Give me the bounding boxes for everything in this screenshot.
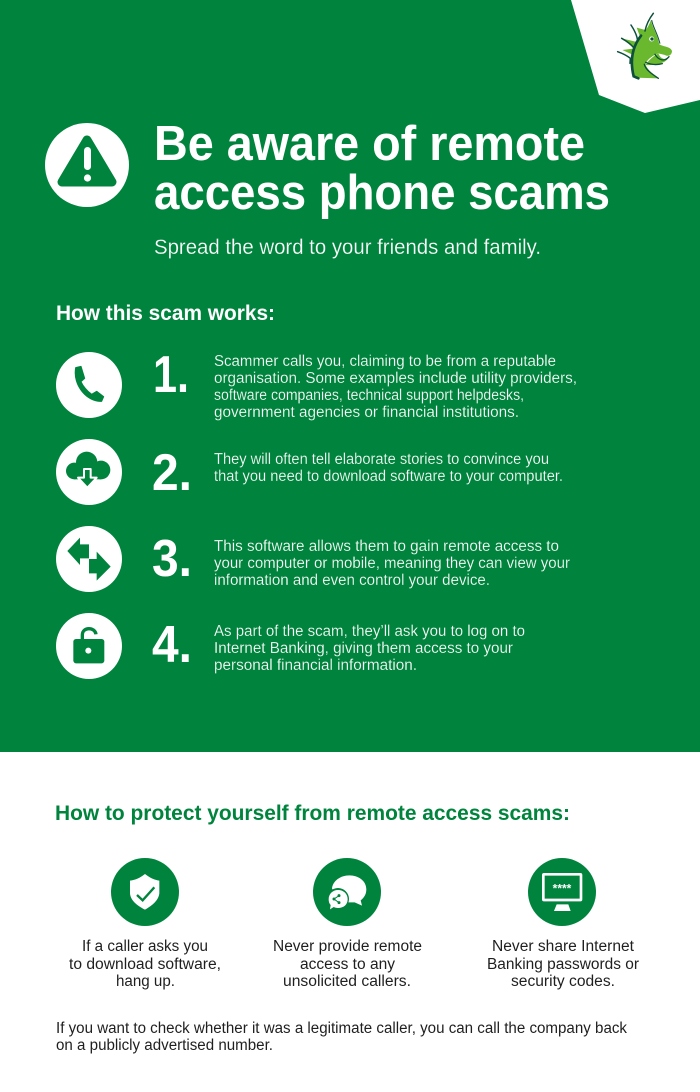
step 3 text: your computer or mobile, meaning they can view your (214, 555, 570, 572)
panel: green header and scam steps background (0, 0, 700, 752)
step 1 text: government agencies or financial institutions. (214, 404, 519, 421)
tip 2 text (273, 938, 422, 990)
icon: chat bubbles with share symbol (313, 858, 381, 926)
step 2 text: that you need to download software to your computer. (214, 468, 563, 485)
step 4 text (214, 623, 525, 674)
step 4 number: 4. (152, 616, 192, 674)
step 1 text: organisation. Some examples include utility providers, (214, 370, 577, 387)
tip 3 text: Never share Internet (492, 938, 635, 955)
icon: phone (56, 352, 122, 418)
tip 2 text: access to any (300, 956, 395, 973)
heading: how this scam works: How this scam works: (56, 301, 275, 325)
tip 1 text: If a caller asks you (82, 938, 208, 955)
step 1 text (214, 353, 577, 421)
step 2 text: They will often tell elaborate stories to convince you (214, 451, 549, 468)
footer note (56, 1020, 627, 1054)
step 4 text: As part of the scam, they’ll ask you to log on to (214, 623, 525, 640)
step 3 text: information and even control your device. (214, 572, 490, 589)
step 3 text: This software allows them to gain remote access to (214, 538, 559, 555)
title (154, 117, 610, 220)
footer note: on a publicly advertised number. (56, 1037, 273, 1054)
footer note: If you want to check whether it was a legitimate caller, you can call the company back (56, 1020, 627, 1037)
step 3 text (214, 538, 570, 589)
step 4 text: personal financial information. (214, 657, 417, 674)
step 3 number: 3. (152, 530, 192, 588)
tip 3 text: security codes. (511, 973, 615, 990)
tip 1 text: hang up. (116, 973, 175, 990)
tip 2 text: Never provide remote (273, 938, 422, 955)
step 1 number: 1. (153, 346, 189, 404)
tip 3 text: Banking passwords or (487, 956, 639, 973)
step 1 text: Scammer calls you, claiming to be from a reputable (214, 353, 556, 370)
icon: green dragon logo (618, 13, 672, 78)
icon: shield with check (111, 858, 179, 926)
tip 1 text (69, 938, 221, 990)
step 2 text (214, 451, 563, 485)
icon: computer monitor with password (528, 858, 596, 926)
icon: two-way arrows (56, 526, 122, 592)
step 4 text: Internet Banking, giving them access to your (214, 640, 513, 657)
subtitle: Spread the word to your friends and family. (154, 236, 541, 259)
tip 3 text (487, 938, 639, 990)
panel: white logo tab (571, 0, 700, 113)
heading: how to protect yourself: How to protect yourself from remote access scams: (55, 801, 570, 825)
title: Be aware of remote (154, 117, 585, 171)
icon: warning triangle (45, 123, 129, 207)
tip 1 text: to download software, (69, 956, 221, 973)
icon: cloud download (56, 439, 122, 505)
step 2 number: 2. (152, 444, 192, 502)
step 1 text: software companies, technical support helpdesks, (214, 387, 524, 404)
icon: computer monitor with password: **** (553, 881, 572, 895)
tip 2 text: unsolicited callers. (283, 973, 411, 990)
title: access phone scams (154, 166, 610, 220)
icon: open padlock (56, 613, 122, 679)
